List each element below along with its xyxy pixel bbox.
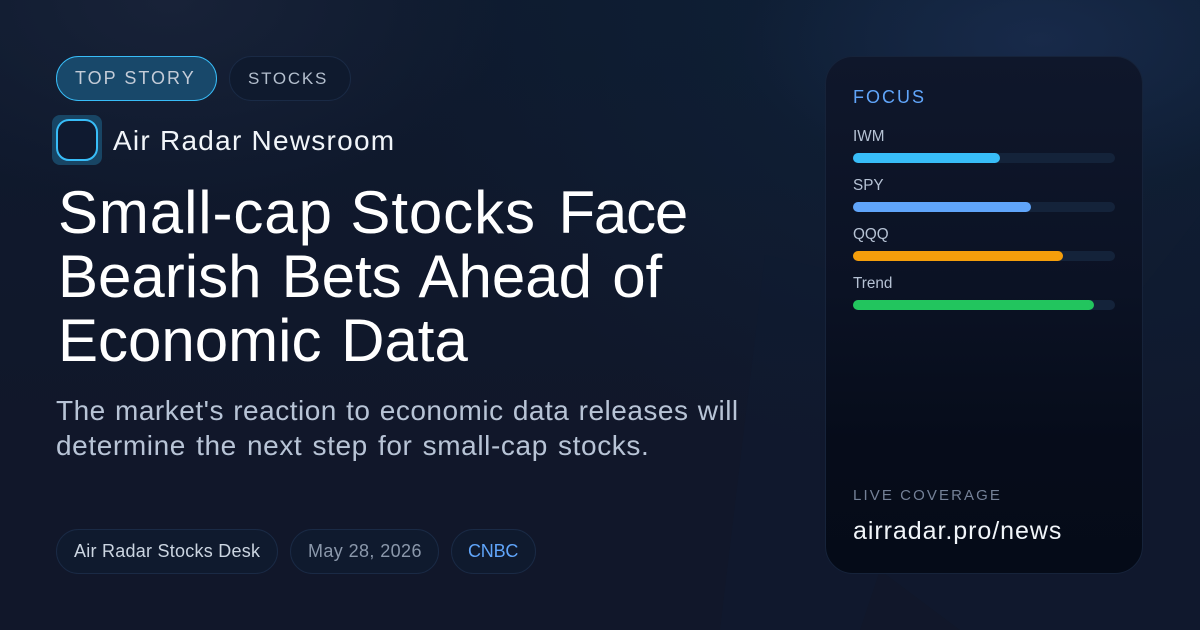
- bar: Trend: Trend: [853, 275, 892, 292]
- tag: top story: [56, 56, 217, 101]
- title: Economic Data: [58, 307, 468, 374]
- bar: IWM: IWM: [853, 128, 884, 145]
- bar: SPY: SPY: [853, 177, 884, 194]
- live coverage label: LIVE COVERAGE: [853, 487, 1002, 504]
- title: Small-cap Stocks Face: [58, 179, 687, 246]
- logo icon: [52, 115, 102, 165]
- bar: QQQ: [853, 226, 1115, 261]
- subtitle: [56, 395, 739, 461]
- url: airradar.pro/news: [853, 517, 1062, 545]
- subtitle: The market's reaction to economic data releases will: [56, 395, 739, 426]
- title: [58, 179, 687, 374]
- meta: date: May 28, 2026: [308, 541, 422, 561]
- tag: top story: TOP STORY: [75, 68, 196, 88]
- panel heading: FOCUS: [853, 87, 926, 107]
- subtitle: determine the next step for small-cap stocks.: [56, 430, 649, 461]
- bar: Trend: [853, 275, 1115, 310]
- brand name: Air Radar Newsroom: [113, 125, 395, 156]
- meta: date: [290, 529, 439, 574]
- title: Bearish Bets Ahead of: [58, 243, 662, 310]
- meta: desk: Air Radar Stocks Desk: [74, 541, 260, 561]
- meta: source: [451, 529, 536, 574]
- bar: SPY: [853, 177, 1115, 212]
- tag: stocks: STOCKS: [248, 69, 328, 88]
- meta: desk: [56, 529, 278, 574]
- tag: stocks: [229, 56, 351, 101]
- bar: QQQ: QQQ: [853, 226, 889, 243]
- bar: IWM: [853, 128, 1115, 163]
- panel: focus: [825, 56, 1143, 574]
- meta: source: CNBC: [468, 541, 518, 561]
